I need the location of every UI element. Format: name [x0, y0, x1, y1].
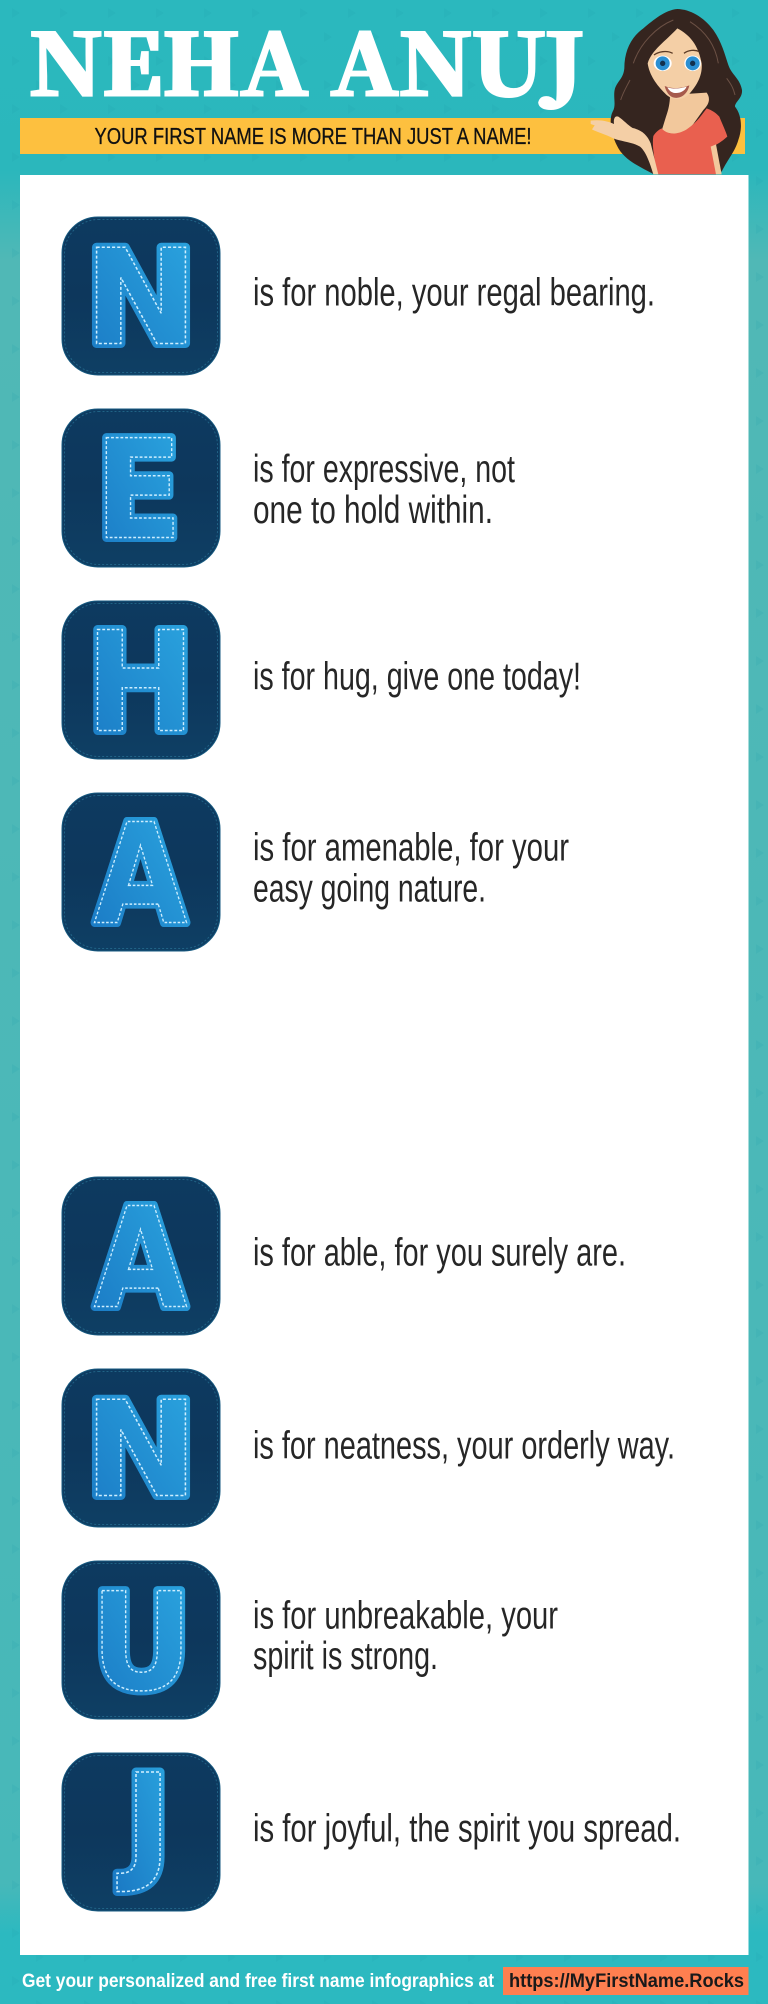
- letter tile A: [62, 793, 220, 956]
- letter tile N: N: [84, 221, 198, 375]
- neck and chest: [662, 93, 709, 134]
- text U: spirit is strong.: [253, 1635, 438, 1678]
- text H: is for hug, give one today!: [253, 656, 581, 698]
- mouth: [665, 85, 689, 98]
- hair: [611, 9, 742, 174]
- subtitle band: [20, 118, 745, 154]
- letter tile U: U: [91, 1564, 192, 1721]
- letter tile J: J: [116, 1748, 172, 1897]
- letter tile E: E: [95, 412, 182, 570]
- text U: is for unbreakable, your: [253, 1594, 558, 1638]
- text E: one to hold within.: [253, 489, 493, 532]
- left eye: [654, 56, 672, 71]
- text A: easy going nature.: [253, 868, 486, 910]
- row: J: [62, 1748, 681, 1911]
- right eye: [684, 56, 701, 71]
- left hand and arm: [591, 116, 658, 174]
- row: H: [62, 601, 581, 763]
- footer url badge: https://MyFirstName.Rocks: [509, 1970, 744, 1992]
- text U: [253, 1594, 558, 1678]
- text E: [253, 448, 515, 532]
- letter tile A: A: [94, 1178, 187, 1340]
- letter tile N: N: [84, 221, 198, 375]
- letter tile J: J: [116, 1748, 172, 1897]
- eyebrows: [654, 50, 699, 55]
- letter tile N: N: [84, 1373, 198, 1527]
- letter tile N: N: [84, 1373, 198, 1527]
- text E: is for expressive, not: [253, 448, 515, 491]
- text A: [253, 826, 569, 910]
- letter tile E: [62, 409, 220, 570]
- letter tile U: U: [91, 1564, 192, 1721]
- row: N: [62, 217, 655, 375]
- letter tile H: H: [85, 602, 196, 763]
- row: N (second word): [62, 1369, 675, 1527]
- right arm: [711, 144, 722, 174]
- row: A (second word): [62, 1177, 626, 1340]
- illustration: smiling woman presenting: [591, 9, 742, 174]
- hair highlights: [621, 20, 735, 100]
- title: NEHA ANUJ: [29, 0, 584, 120]
- letter tile A: A: [94, 794, 187, 956]
- row: A: [62, 793, 569, 956]
- face: [648, 28, 702, 99]
- footer text: Get your personalized and free first name infographics at: [22, 1970, 494, 1992]
- letter tile H: [62, 601, 220, 763]
- coral top: [653, 108, 727, 174]
- row: E: [62, 409, 515, 570]
- text A: is for amenable, for your: [253, 826, 569, 870]
- subtitle band: YOUR FIRST NAME IS MORE THAN JUST A NAME!: [94, 123, 532, 149]
- row: U: [62, 1561, 558, 1721]
- letter tile E: E: [95, 412, 182, 570]
- text A: is for able, for you surely are.: [253, 1232, 626, 1274]
- letter tile H: H: [85, 602, 196, 763]
- letter tile A: A: [94, 794, 187, 956]
- letter tile A: A: [94, 1178, 187, 1340]
- letter tile U: [62, 1561, 220, 1721]
- letter tile A: [62, 1177, 220, 1340]
- letter tile J: [62, 1748, 220, 1911]
